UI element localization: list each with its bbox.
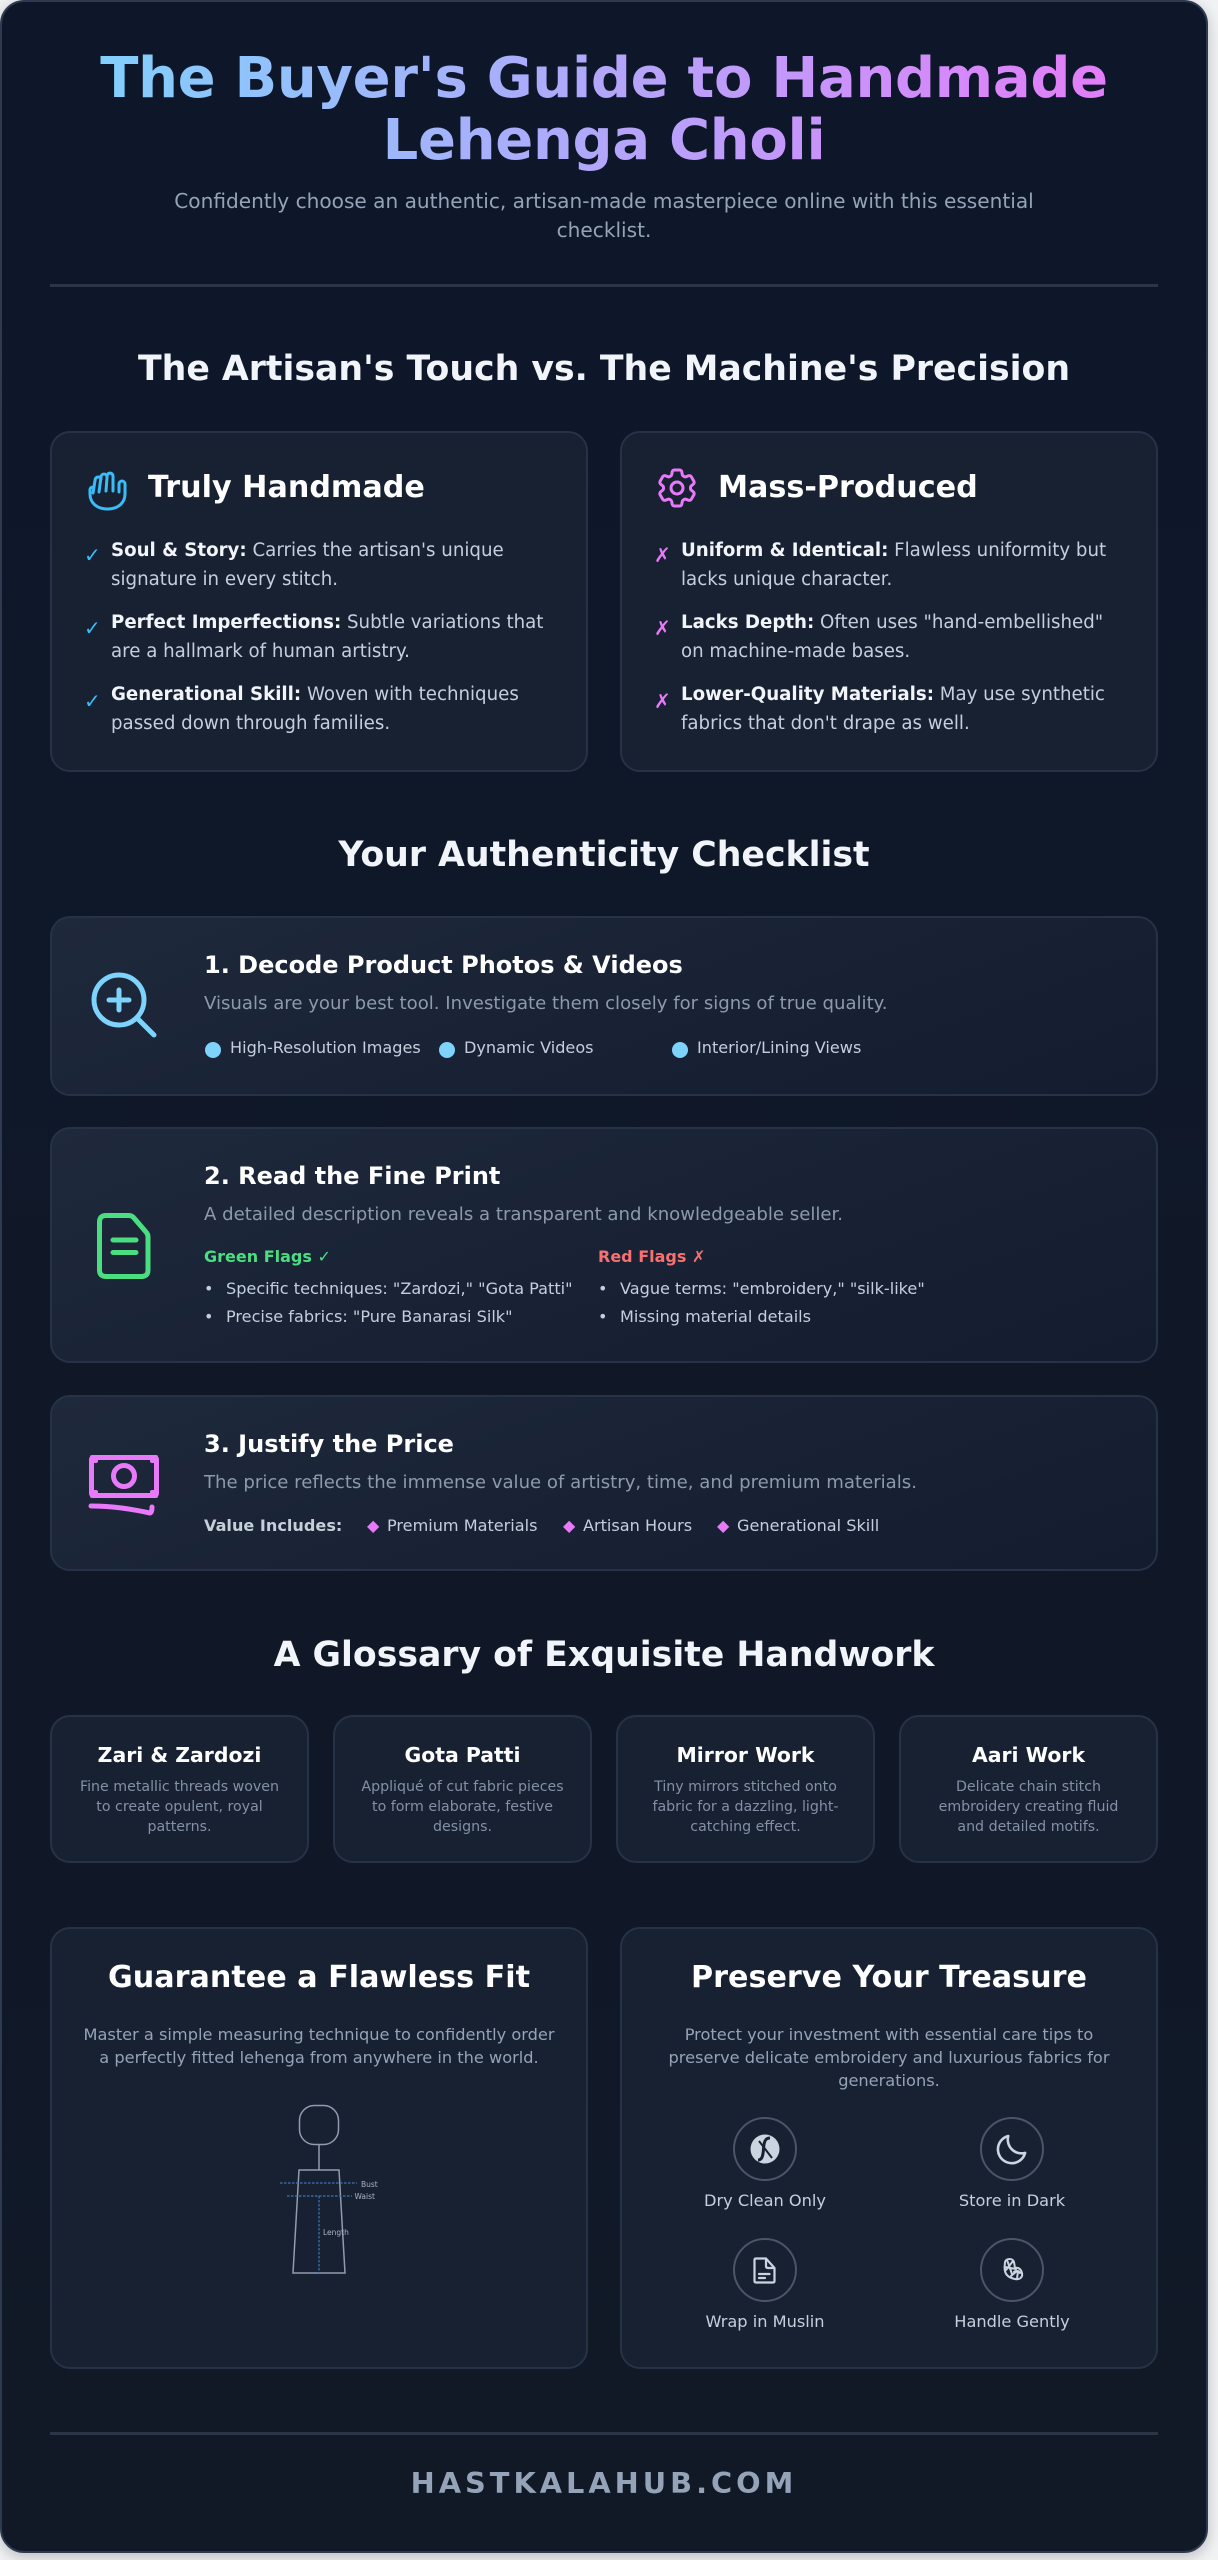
list item 2	[84, 612, 543, 662]
heading: Preserve Your Treasure	[691, 1960, 1087, 1995]
definition: catching effect.	[690, 1819, 801, 1835]
glossary card: aari work	[899, 1715, 1158, 1863]
term: Mirror Work	[677, 1742, 814, 1766]
subtitle	[174, 189, 1034, 242]
green flag 1: •	[204, 1279, 214, 1298]
list item 2: are a hallmark of human artistry.	[111, 640, 410, 662]
care item: handle gently	[954, 2238, 1070, 2331]
bullet: high-resolution: High-Resolution Images	[230, 1038, 421, 1057]
value row	[204, 1516, 879, 1535]
value label: Value Includes:	[204, 1516, 342, 1535]
value: hours: Artisan Hours	[583, 1516, 692, 1535]
step description: A detailed description reveals a transparent and knowledgeable seller.	[204, 1204, 843, 1225]
description: a perfectly fitted lehenga from anywhere in the world.	[99, 2048, 539, 2067]
heading: Truly Handmade	[148, 470, 425, 505]
label: Store in Dark	[959, 2191, 1065, 2210]
icon: gear	[658, 468, 696, 508]
diagram: body measurement: Length	[323, 2228, 349, 2237]
icon: moon	[980, 2117, 1044, 2181]
value: skill: ◆	[717, 1516, 729, 1535]
definition: to create opulent, royal	[96, 1799, 263, 1815]
term: Gota Patti	[404, 1742, 520, 1766]
red flag 1: •	[598, 1279, 608, 1298]
panel: step 2 fine print	[50, 1127, 1158, 1363]
description	[669, 2025, 1110, 2090]
list item 3	[654, 684, 1105, 734]
definition: patterns.	[147, 1819, 212, 1835]
list item 2: ✗	[654, 616, 671, 640]
step heading: 1. Decode Product Photos & Videos	[204, 951, 683, 979]
icon: document	[733, 2238, 797, 2302]
title: Lehenga Choli	[383, 108, 825, 173]
list item 2: Perfect Imperfections: Subtle variations that	[111, 612, 543, 633]
diagram: body measurement: Waist	[354, 2192, 375, 2201]
list item 1: signature in every stitch.	[111, 568, 338, 590]
label: Dry Clean Only	[704, 2191, 826, 2210]
glossary card: mirror work	[616, 1715, 875, 1863]
list item 3: fabrics that don't drape as well.	[681, 712, 970, 734]
value: skill: Generational Skill	[737, 1516, 879, 1535]
panel: step 1 photos	[50, 916, 1158, 1096]
list item 3: ✗	[654, 689, 671, 713]
icon: banknote	[88, 1455, 159, 1516]
definition	[80, 1779, 279, 1835]
list item 1	[654, 540, 1106, 590]
red flag 1: Vague terms: "embroidery," "silk-like"	[620, 1279, 925, 1298]
care item: wrap in muslin	[705, 2238, 825, 2331]
footer brand: HASTKALAHUB.COM	[411, 2466, 797, 2500]
definition: designs.	[433, 1819, 492, 1835]
definition: fabric for a dazzling, light-	[652, 1799, 839, 1815]
definition: Fine metallic threads woven	[80, 1779, 279, 1795]
diagram: body measurement: Bust	[361, 2180, 378, 2189]
label: Handle Gently	[954, 2312, 1070, 2331]
subtitle: checklist.	[557, 218, 651, 242]
list item 1: lacks unique character.	[681, 568, 892, 590]
care item: store in dark	[959, 2117, 1065, 2210]
list item 2: Lacks Depth: Often uses "hand-embellished"	[681, 612, 1103, 633]
title: The Buyer's Guide to Handmade	[100, 46, 1108, 111]
bullet: interior views: Interior/Lining Views	[697, 1038, 861, 1057]
step heading: 2. Read the Fine Print	[204, 1162, 500, 1190]
step description: The price reflects the immense value of artistry, time, and premium materials.	[204, 1472, 917, 1493]
glossary card: gota patti	[333, 1715, 592, 1863]
list item 1: ✗	[654, 543, 671, 567]
step heading: 3. Justify the Price	[204, 1430, 454, 1458]
value: materials: ◆	[367, 1516, 379, 1535]
list item 1	[84, 540, 504, 590]
term: Aari Work	[972, 1742, 1085, 1766]
green flags	[204, 1247, 573, 1326]
panel: step 3 price	[50, 1395, 1158, 1571]
green flags title: Green Flags ✓	[204, 1247, 331, 1266]
subtitle: Confidently choose an authentic, artisan-made masterpiece online with this essential	[174, 189, 1034, 213]
red flags	[598, 1247, 925, 1326]
list item 3: ✓	[84, 689, 101, 713]
list item 3	[84, 684, 519, 734]
care item: dry clean	[704, 2117, 826, 2210]
value: hours: ◆	[563, 1516, 575, 1535]
heading: Guarantee a Flawless Fit	[108, 1960, 530, 1995]
heading: glossary: A Glossary of Exquisite Handwork	[274, 1635, 934, 1675]
heading: Mass-Produced	[718, 470, 978, 505]
definition	[361, 1779, 564, 1835]
green flag 2: •	[204, 1307, 214, 1326]
description: Protect your investment with essential care tips to	[685, 2025, 1093, 2044]
panel: flawless fit	[50, 1927, 588, 2369]
definition: Tiny mirrors stitched onto	[654, 1779, 837, 1795]
list item 1: Uniform & Identical: Flawless uniformity but	[681, 540, 1106, 561]
green flag 1: Specific techniques: "Zardozi," "Gota Patti"	[226, 1279, 573, 1298]
panel: mass-produced	[620, 431, 1158, 772]
red flags title: Red Flags ✗	[598, 1247, 705, 1266]
list item 3: passed down through families.	[111, 712, 390, 734]
label: Wrap in Muslin	[705, 2312, 825, 2331]
bullet: dynamic videos: Dynamic Videos	[464, 1038, 594, 1057]
list item 3: Lower-Quality Materials: May use synthetic	[681, 684, 1105, 705]
heading: artisan vs machine: The Artisan's Touch vs. The Machine's Precision	[138, 349, 1070, 389]
definition: embroidery creating fluid	[939, 1799, 1118, 1815]
step description: Visuals are your best tool. Investigate them closely for signs of true quality.	[204, 993, 888, 1014]
definition	[652, 1779, 839, 1835]
description: generations.	[838, 2071, 940, 2090]
icon: hand	[88, 472, 126, 510]
list item 2: ✓	[84, 616, 101, 640]
red flag 2: Missing material details	[620, 1307, 811, 1326]
definition: Appliqué of cut fabric pieces	[361, 1779, 564, 1795]
glossary card: zari	[50, 1715, 309, 1863]
definition: Delicate chain stitch	[956, 1779, 1101, 1795]
diagram: body measurement	[280, 2104, 378, 2274]
list item 1: Soul & Story: Carries the artisan's unique	[111, 540, 504, 561]
icon: magnifying glass	[92, 972, 156, 1038]
heading: checklist: Your Authenticity Checklist	[338, 835, 870, 875]
description	[84, 2025, 554, 2067]
icon: dry clean	[733, 2117, 797, 2181]
definition	[939, 1779, 1118, 1835]
panel: truly handmade	[50, 431, 588, 772]
red flag 2: •	[598, 1307, 608, 1326]
value: materials: Premium Materials	[387, 1516, 538, 1535]
list item 2: on machine-made bases.	[681, 640, 910, 662]
green flag 2: Precise fabrics: "Pure Banarasi Silk"	[226, 1307, 513, 1326]
icon: gentle hand	[980, 2238, 1044, 2302]
panel: preserve your treasure	[620, 1927, 1158, 2369]
icon: document	[97, 1213, 150, 1279]
list item 3: Generational Skill: Woven with techniques	[111, 684, 519, 705]
definition: and detailed motifs.	[957, 1819, 1100, 1835]
description: Master a simple measuring technique to confidently order	[84, 2025, 554, 2044]
list item 2	[654, 612, 1103, 662]
title	[50, 48, 1158, 182]
definition: to form elaborate, festive	[372, 1799, 553, 1815]
term: Zari & Zardozi	[98, 1742, 261, 1766]
description: preserve delicate embroidery and luxurious fabrics for	[669, 2048, 1109, 2067]
list item 1: ✓	[84, 543, 101, 567]
